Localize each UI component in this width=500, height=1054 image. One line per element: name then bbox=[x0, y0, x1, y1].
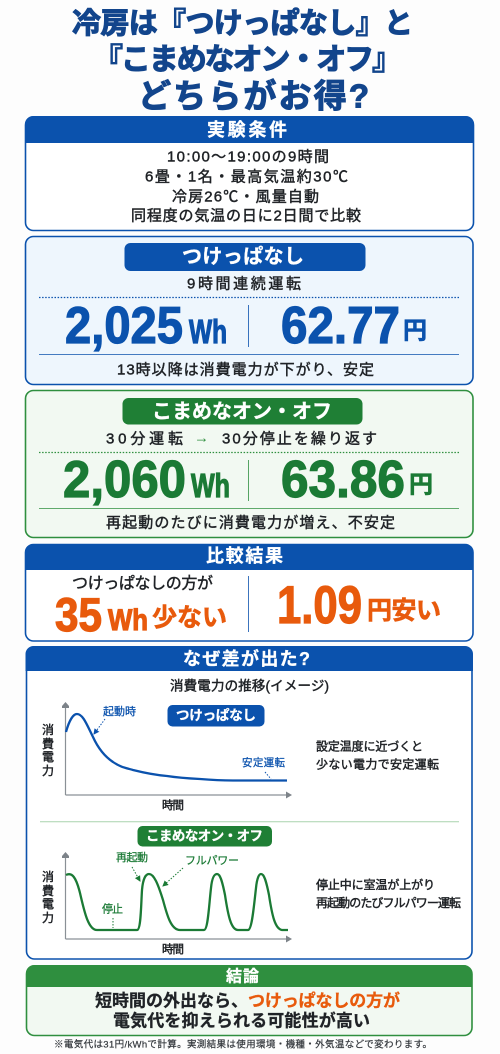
callout: stop bbox=[102, 902, 123, 928]
text: conclusion: 短時間の外出なら、 bbox=[95, 992, 248, 1010]
header: experiment conditions: 実験条件 bbox=[207, 120, 287, 140]
value: cost: 63.86 bbox=[281, 451, 405, 509]
text: conclusion: つけっぱなしの方が bbox=[248, 990, 400, 1010]
text: conditions list: 同程度の気温の日に2日間で比較 bbox=[131, 208, 361, 224]
text: note: 13時以降は消費電力が下がり、安定 bbox=[117, 362, 374, 378]
text: conditions list: 6畳・1名・最高気温約30℃ bbox=[145, 168, 348, 186]
panel: komame on off bbox=[26, 390, 473, 538]
header: comparison result: 比較結果 bbox=[206, 546, 283, 566]
text: chart heading: 消費電力の推移(イメージ) bbox=[170, 678, 329, 694]
pill: tsukeppanashi bbox=[124, 243, 366, 271]
text: cycle bbox=[106, 430, 377, 448]
y axis label: 費 bbox=[42, 883, 54, 898]
value: watt hours less: Wh bbox=[108, 604, 148, 637]
value: watt hours less: 少ない bbox=[152, 604, 227, 632]
title bbox=[72, 7, 413, 114]
text: conclusion: 電気代を抑えられる可能性が高い bbox=[113, 1010, 370, 1030]
text: conditions list bbox=[131, 148, 361, 224]
text: cycle: → bbox=[194, 430, 209, 446]
text: continuous operation: 9時間連続運転 bbox=[187, 276, 301, 292]
text: lead: つけっぱなしの方が bbox=[72, 574, 213, 592]
header: experiment conditions bbox=[25, 116, 474, 143]
value: yen cheaper: 円安い bbox=[367, 597, 441, 625]
panel: conclusion bbox=[26, 965, 472, 1036]
text: cycle: 30分停止を繰り返す bbox=[222, 430, 377, 448]
y axis label: 力 bbox=[42, 911, 54, 925]
panel: experiment conditions bbox=[25, 116, 474, 230]
pill: tsukeppanashi: つけっぱなし bbox=[182, 245, 304, 268]
value: cost: 62.77 bbox=[281, 297, 400, 355]
x axis label: 時間 bbox=[162, 943, 184, 956]
header: why the difference bbox=[26, 646, 473, 671]
footnote: ※電気代は31円/kWhで計算。実測結果は使用環境・機種・外気温などで変わります。 bbox=[54, 1038, 432, 1050]
panel: why the difference bbox=[26, 646, 473, 959]
y axis label: 電 bbox=[42, 897, 54, 911]
header: why the difference: なぜ差が出た? bbox=[183, 648, 310, 669]
x axis label: 時間 bbox=[162, 799, 184, 812]
line chart: komame on off bbox=[42, 850, 292, 956]
pill: komame on off: こまめなオン・オフ bbox=[152, 400, 332, 423]
title: どちらがお得? bbox=[138, 78, 369, 114]
callout: startup: 起動時 bbox=[103, 704, 136, 718]
callout: full power bbox=[163, 854, 239, 886]
panel: tsukeppanashi bbox=[26, 236, 473, 384]
value: cost: 円 bbox=[403, 318, 427, 344]
pill: komame on off: こまめなオン・オフ bbox=[146, 828, 263, 844]
header: comparison result bbox=[25, 544, 473, 570]
text: note: 再起動のたびに消費電力が増え、不安定 bbox=[106, 514, 395, 532]
text: conditions list: 10:00〜19:00の9時間 bbox=[167, 148, 329, 166]
text: tsukeppanashi explanation: 設定温度に近づくと bbox=[316, 740, 423, 754]
value: yen cheaper bbox=[277, 576, 441, 635]
text: conditions list: 冷房26℃・風量自動 bbox=[172, 188, 319, 206]
text: komame explanation: 停止中に室温が上がり bbox=[316, 877, 435, 892]
y axis label: 費 bbox=[42, 736, 54, 751]
text: tsukeppanashi explanation: 少ない電力で安定運転 bbox=[316, 758, 439, 772]
text: tsukeppanashi explanation bbox=[316, 740, 439, 772]
y axis label: 消 bbox=[42, 870, 54, 884]
callout: full power: フルパワー bbox=[185, 854, 239, 867]
y axis label: 消 bbox=[42, 723, 54, 737]
header: conclusion: 結論 bbox=[226, 966, 259, 986]
y axis label: 力 bbox=[42, 764, 54, 778]
text: komame explanation: 再起動のたびフルパワー運転 bbox=[316, 896, 461, 910]
text: komame explanation bbox=[316, 877, 461, 910]
pill: komame on off bbox=[122, 398, 362, 424]
callout: startup bbox=[94, 704, 136, 734]
value: watt hours less: 35 bbox=[55, 588, 102, 641]
y axis label bbox=[42, 723, 54, 778]
title: 『こまめなオン・オフ』 bbox=[93, 44, 402, 76]
pill: tsukeppanashi: つけっぱなし bbox=[176, 708, 256, 723]
value: cost: 円 bbox=[409, 472, 433, 498]
text: conclusion bbox=[95, 990, 400, 1030]
value: power usage: 2,060 bbox=[63, 451, 186, 509]
value: power usage: 2,025 bbox=[65, 297, 183, 355]
y axis label: 電 bbox=[42, 750, 54, 764]
value: power usage: Wh bbox=[189, 313, 227, 350]
header: conclusion bbox=[26, 965, 472, 987]
callout: stop: 停止 bbox=[102, 902, 123, 916]
pill: komame on off bbox=[138, 826, 272, 846]
y axis label bbox=[42, 870, 54, 925]
panel: comparison result bbox=[25, 544, 473, 641]
value: watt hours less bbox=[55, 588, 227, 641]
callout: stable: 安定運転 bbox=[242, 757, 286, 769]
line chart: tsukeppanashi bbox=[42, 702, 292, 812]
text: cycle: 30分運転 bbox=[106, 430, 183, 448]
callout: stable bbox=[242, 757, 286, 779]
title: 冷房は『つけっぱなし』と bbox=[72, 7, 413, 40]
value: power usage: Wh bbox=[191, 467, 230, 504]
callout: restart: 再起動 bbox=[116, 850, 148, 864]
callout: restart bbox=[116, 850, 148, 881]
pill: tsukeppanashi bbox=[168, 705, 264, 726]
value: yen cheaper: 1.09 bbox=[277, 576, 362, 635]
